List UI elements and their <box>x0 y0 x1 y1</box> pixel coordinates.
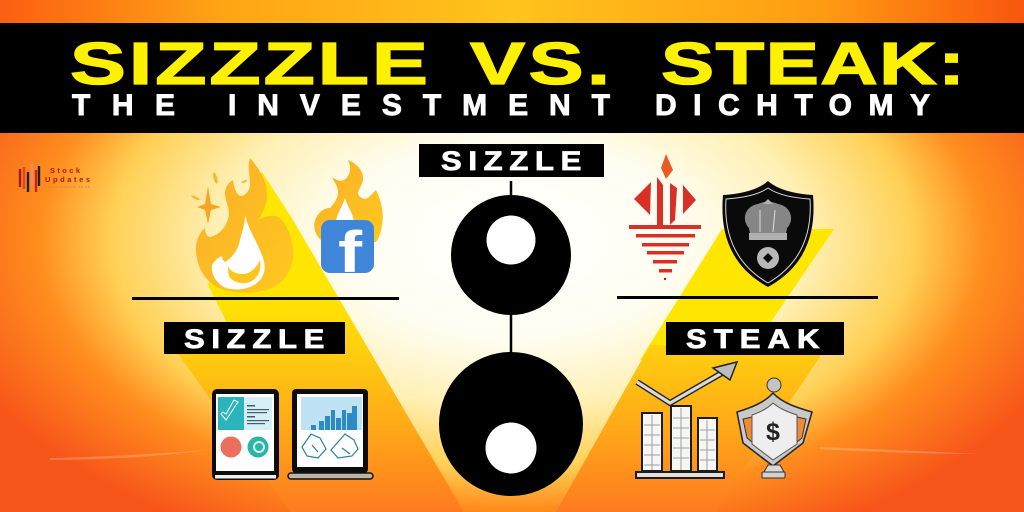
icon: black shield with crown <box>722 181 814 287</box>
icon: dollar shield <box>737 378 812 478</box>
gold beam: left lower <box>172 345 464 512</box>
title: steak: STEAK: <box>661 31 965 97</box>
logo: Stock Updates <box>20 164 90 192</box>
icon: growth bars with arrow <box>636 362 737 478</box>
subtitle: investment: INVESTMENT <box>228 89 610 122</box>
icon: flame with Facebook logo <box>314 160 383 284</box>
logo: Stock Updates: Updates <box>45 175 90 184</box>
gold beam: right lower <box>556 345 828 512</box>
yellow beam: right <box>640 229 834 360</box>
center circle: bottom <box>439 352 583 496</box>
yellow beam: left <box>208 172 464 512</box>
label: SIZZLE left: SIZZLE <box>184 325 324 354</box>
center connector line <box>510 181 512 360</box>
title banner <box>0 23 1024 133</box>
subtitle: dichtomy: DICHTOMY <box>655 89 930 122</box>
Facebook square: f <box>338 220 362 284</box>
label: SIZZLE center <box>419 144 604 177</box>
title: vs: VS. <box>470 31 610 97</box>
center circle: top <box>451 195 571 315</box>
icon: tablet report <box>212 389 279 480</box>
label: STEAK: STEAK <box>686 325 819 354</box>
icon: large flame with sparkle <box>191 158 293 293</box>
label: STEAK <box>666 322 844 355</box>
title: sizzzle: SIZZZLE <box>70 31 428 97</box>
label: SIZZLE center: SIZZLE <box>441 147 581 176</box>
logo: Stock Updates: Stock <box>50 166 81 175</box>
logo: Stock Updates: stockupdates.co.uk <box>45 185 90 189</box>
subtitle: the: THE <box>72 89 175 122</box>
icon: red torch <box>629 154 701 280</box>
divider: left <box>132 297 399 300</box>
icon: laptop chart <box>288 389 373 479</box>
divider: right <box>617 296 878 299</box>
icon: dollar shield: $ <box>766 418 780 446</box>
